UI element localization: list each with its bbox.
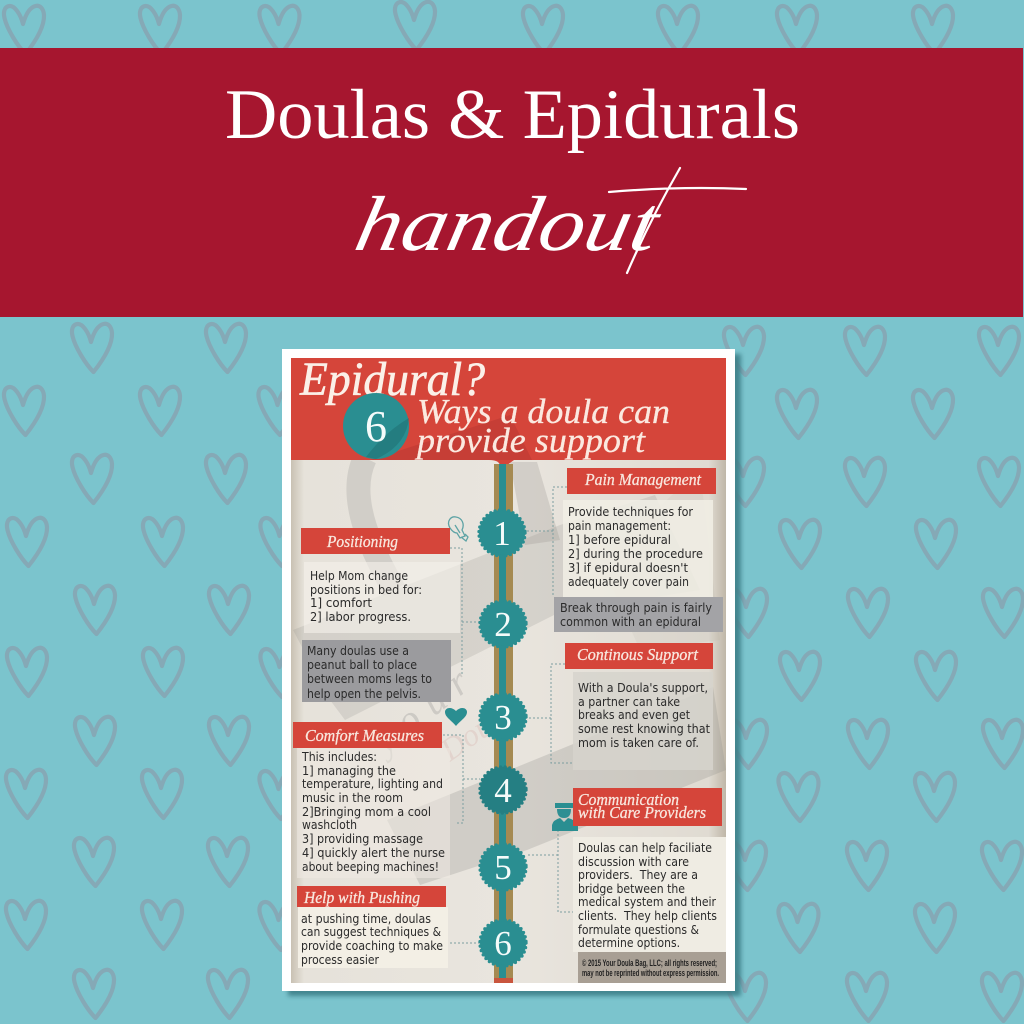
- subtitle: handout: [348, 168, 746, 273]
- poster: Epidural support handout: [282, 349, 735, 991]
- watermark shapes: your: [360, 659, 478, 765]
- icon: nurse: [552, 803, 578, 831]
- panel: pain management: Provide techniques for: [568, 505, 693, 519]
- panel: pain management: 3] if epidural doesn't: [568, 561, 688, 575]
- panel: comfort measures: 3] providing massage: [302, 832, 423, 846]
- dotted connectors: [443, 487, 575, 943]
- panel: continuous support: [565, 643, 713, 770]
- poster header: [291, 353, 726, 468]
- panel: continuous support: a partner can take: [578, 695, 680, 709]
- copyright strip: © 2015 Your Doula Bag, LLC; all rights reserved;: [582, 958, 717, 968]
- step 2: [480, 601, 526, 647]
- panel: comfort measures: washcloth: [302, 818, 357, 832]
- panel: comfort measures: 2]Bringing mom a cool: [302, 805, 431, 819]
- panel: help with pushing: Help with Pushing: [303, 888, 420, 907]
- panel: help with pushing: [297, 886, 448, 968]
- step 4: [480, 767, 526, 813]
- panel: positioning: peanut ball to place: [307, 658, 417, 672]
- panel: pain management: [554, 468, 723, 632]
- heading: 6 ways a doula can provide support: provide support: [414, 421, 646, 460]
- step 1: [479, 510, 525, 556]
- panel: positioning: Positioning: [326, 532, 398, 551]
- panel: communication with care providers: formulate questions &: [578, 923, 699, 937]
- poster card shadow: [288, 354, 741, 996]
- panel: positioning: [301, 528, 460, 702]
- copyright strip: [578, 952, 726, 983]
- icon: light bulb: [449, 517, 468, 541]
- panel: comfort measures: [293, 722, 450, 878]
- panel: comfort measures: This includes:: [301, 750, 377, 764]
- step 1: 1: [493, 514, 511, 553]
- badge: 6: 6: [365, 402, 387, 451]
- heading: Epidural?: Epidural?: [299, 353, 485, 406]
- watermark shapes: [293, 458, 726, 885]
- panel: communication with care providers: bridge between the: [578, 882, 685, 896]
- panel: comfort measures: temperature, lighting and: [302, 777, 443, 791]
- panel: pain management: adequately cover pain: [568, 575, 689, 589]
- panel: communication with care providers: medical system and their: [578, 895, 716, 909]
- panel: communication with care providers: [573, 788, 726, 952]
- title banner: [0, 48, 1023, 317]
- panel: pain management: pain management:: [568, 519, 671, 533]
- panel: comfort measures: about beeping machines!: [302, 860, 439, 874]
- heading: 6 ways a doula can provide support: Ways a doula can: [417, 392, 670, 431]
- panel: continuous support: With a Doula's support,: [578, 681, 708, 695]
- panel: help with pushing: provide coaching to make: [301, 939, 443, 953]
- panel: pain management: Pain Management: [584, 470, 702, 489]
- step 3: [480, 694, 526, 740]
- panel: positioning: help open the pelvis.: [307, 687, 421, 701]
- panel: continuous support: some rest knowing that: [578, 722, 710, 736]
- subtitle: handout: handout: [348, 182, 669, 268]
- copyright strip: may not be reprinted without express permission.: [582, 968, 719, 978]
- panel: continuous support: breaks and even get: [578, 708, 690, 722]
- numbered step circles: [479, 510, 526, 966]
- panel: continuous support: mom is taken care of.: [578, 736, 699, 750]
- panel: positioning: positions in bed for:: [310, 583, 422, 597]
- step 6: 6: [494, 924, 512, 963]
- step 6: [480, 920, 526, 966]
- panel: help with pushing: can suggest techniques &: [301, 925, 441, 939]
- panel: positioning: Help Mom change: [310, 569, 408, 583]
- panel: positioning: 2] labor progress.: [310, 610, 411, 624]
- panel: positioning: between moms legs to: [307, 672, 432, 686]
- poster paper background: [291, 458, 726, 983]
- panel: continuous support: Continous Support: [577, 645, 699, 664]
- panel: comfort measures: Comfort Measures: [305, 726, 424, 745]
- step 5: 5: [494, 848, 512, 887]
- step 5: [480, 844, 526, 890]
- panel: help with pushing: process easier: [301, 953, 379, 967]
- panel: communication with care providers: clients. They help clients: [578, 909, 717, 923]
- timeline stripe: [494, 464, 513, 983]
- panel: communication with care providers: providers. They are a: [578, 868, 698, 882]
- panel: comfort measures: 1] managing the: [302, 764, 396, 778]
- heading: 6 ways a doula can provide support: [414, 392, 670, 460]
- panel: positioning: 1] comfort: [310, 596, 372, 610]
- panel: pain management: Break through pain is fairly: [560, 601, 712, 615]
- panel: pain management: 2] during the procedure: [568, 547, 703, 561]
- panel: positioning: Many doulas use a: [307, 644, 409, 658]
- panel: communication with care providers: discussion with care: [578, 855, 689, 869]
- icon: teal heart: [445, 708, 467, 726]
- panel: help with pushing: at pushing time, doulas: [301, 912, 431, 926]
- step 3: 3: [494, 698, 512, 737]
- watermark shapes: Doula: [433, 692, 520, 768]
- step 4: 4: [494, 771, 512, 810]
- panel: pain management: common with an epidural: [560, 615, 701, 629]
- panel: communication with care providers: with Care Providers: [578, 803, 706, 822]
- panel: communication with care providers: determine options.: [578, 936, 680, 950]
- panel: communication with care providers: Doulas can help faciliate: [578, 841, 712, 855]
- panel: pain management: 1] before epidural: [568, 533, 671, 547]
- panel: comfort measures: 4] quickly alert the nurse: [302, 846, 445, 860]
- panel: communication with care providers: Communication: [578, 790, 679, 809]
- title: Doulas & Epidurals: Doulas & Epidurals: [225, 76, 800, 154]
- badge: 6: [343, 393, 409, 459]
- step 2: 2: [494, 605, 512, 644]
- panel: comfort measures: music in the room: [302, 791, 403, 805]
